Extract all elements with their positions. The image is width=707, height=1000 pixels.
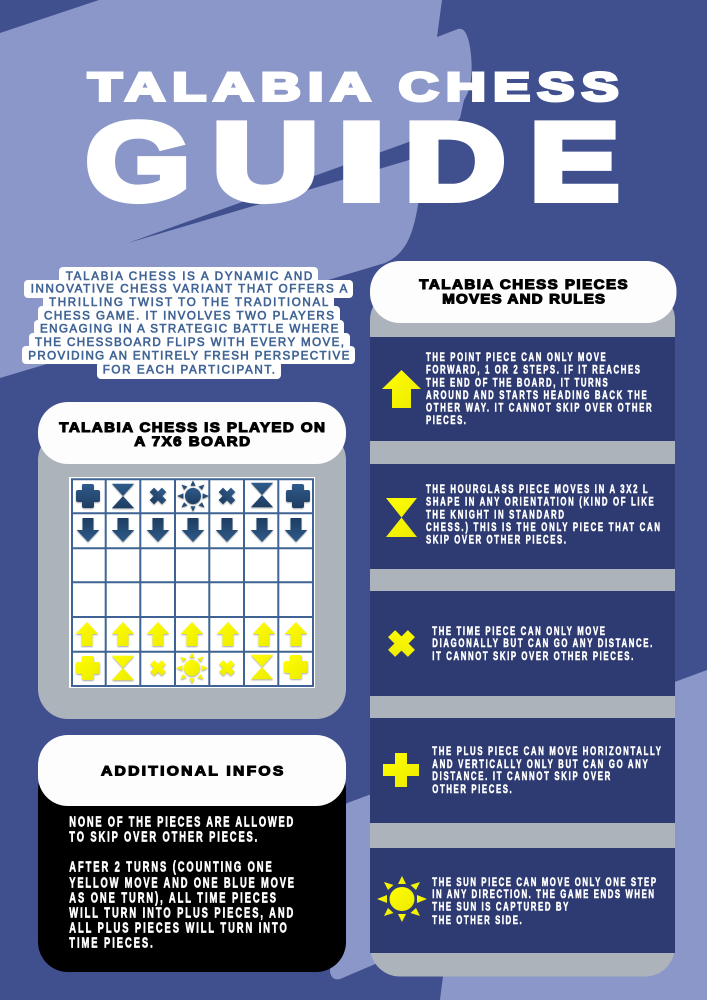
additional infos heading: ADDITIONAL INFOS xyxy=(101,764,283,779)
title line two: E xyxy=(530,100,619,223)
panel: pieces moves and rules xyxy=(370,261,676,976)
intro text block: THRILLING TWIST TO THE TRADITIONAL xyxy=(49,296,329,309)
additional infos heading xyxy=(38,735,346,806)
icon: plus xyxy=(383,753,419,787)
hourglass piece text: CHESS.) THIS IS THE ONLY PIECE THAT CAN xyxy=(426,522,660,535)
time piece text: DIAGONALLY BUT CAN GO ANY DISTANCE. xyxy=(432,638,652,651)
intro text block: ENGAGING IN A STRATEGIC BATTLE WHERE xyxy=(40,323,339,336)
background shape: upper left xyxy=(0,0,472,378)
intro text block: PROVIDING AN ENTIRELY FRESH PERSPECTIVE xyxy=(28,349,350,362)
additional infos text xyxy=(69,814,294,951)
time piece text xyxy=(432,626,652,664)
point piece text: THE POINT PIECE CAN ONLY MOVE xyxy=(426,352,606,365)
additional infos text: AS ONE TURN), ALL TIME PIECES xyxy=(69,890,276,906)
sun piece text: THE OTHER SIDE. xyxy=(432,915,522,928)
intro text block xyxy=(22,267,355,379)
sun piece text: IN ANY DIRECTION. THE GAME ENDS WHEN xyxy=(432,889,654,902)
title xyxy=(86,65,619,223)
additional infos text: YELLOW MOVE AND ONE BLUE MOVE xyxy=(69,875,294,891)
board heading xyxy=(38,402,346,464)
title line two: U xyxy=(212,100,319,223)
panel: additional infos xyxy=(38,735,346,972)
panel: board xyxy=(38,402,346,719)
title line two: D xyxy=(405,100,505,223)
hourglass piece text: SKIP OVER OTHER PIECES. xyxy=(426,534,566,547)
intro text block: TALABIA CHESS IS A DYNAMIC AND xyxy=(66,270,312,283)
blue pieces xyxy=(76,480,310,542)
chess board grid xyxy=(69,477,315,688)
intro text block: INNOVATIVE CHESS VARIANT THAT OFFERS A xyxy=(31,283,348,296)
plus piece text: OTHER PIECES. xyxy=(432,784,512,797)
additional infos text: ALL PLUS PIECES WILL TURN INTO xyxy=(69,919,287,936)
point piece text: PIECES. xyxy=(426,415,466,428)
icon: hourglass xyxy=(386,498,417,537)
title line one: TALABIA CHESS xyxy=(88,65,619,110)
plus piece text xyxy=(432,746,661,797)
hourglass piece text: SHAPE IN ANY ORIENTATION (KIND OF LIKE xyxy=(426,496,654,509)
point piece text: THE END OF THE BOARD, IT TURNS xyxy=(426,377,608,390)
additional infos text: TIME PIECES. xyxy=(69,934,153,951)
time piece text: IT CANNOT SKIP OVER OTHER PIECES. xyxy=(432,651,633,664)
yellow pieces xyxy=(76,622,308,684)
intro text block: THE CHESSBOARD FLIPS WITH EVERY MOVE, xyxy=(35,336,344,349)
additional infos text: NONE OF THE PIECES ARE ALLOWED xyxy=(69,814,293,830)
rules heading xyxy=(370,261,676,323)
rule: hourglass piece xyxy=(370,464,675,569)
sun piece text: THE SUN PIECE CAN MOVE ONLY ONE STEP xyxy=(432,877,656,890)
icon: sun xyxy=(377,876,427,922)
board heading: A 7X6 BOARD xyxy=(134,435,250,450)
icon: time cross xyxy=(382,624,421,663)
sun piece text: THE SUN IS CAPTURED BY xyxy=(432,901,568,914)
background sliver xyxy=(128,125,450,243)
point piece text: FORWARD, 1 OR 2 STEPS. IF IT REACHES xyxy=(426,364,640,377)
rules heading: TALABIA CHESS PIECES xyxy=(419,278,628,293)
additional infos text: AFTER 2 TURNS (COUNTING ONE xyxy=(69,859,272,875)
hourglass piece text: THE KNIGHT IN STANDARD xyxy=(426,509,564,522)
rule: sun piece xyxy=(370,848,675,953)
icon: point arrow xyxy=(382,370,421,408)
hourglass piece text xyxy=(426,484,660,547)
point piece text xyxy=(426,352,652,428)
intro text block: CHESS GAME. IT INVOLVES TWO PLAYERS xyxy=(44,309,334,322)
sun piece text xyxy=(432,877,656,928)
additional infos text: WILL TURN INTO PLUS PIECES, AND xyxy=(69,905,293,921)
background shape: lower right xyxy=(330,670,707,1000)
additional infos text: TO SKIP OVER OTHER PIECES. xyxy=(69,829,257,845)
plus piece text: DISTANCE. IT CANNOT SKIP OVER xyxy=(432,771,611,784)
rule: time piece xyxy=(370,591,675,696)
plus piece text: AND VERTICALLY ONLY BUT CAN GO ANY xyxy=(432,759,648,772)
time piece text: THE TIME PIECE CAN ONLY MOVE xyxy=(432,626,605,639)
rule: point piece xyxy=(370,337,675,441)
intro text block: FOR EACH PARTICIPANT. xyxy=(103,363,275,376)
hourglass piece text: THE HOURGLASS PIECE MOVES IN A 3X2 L xyxy=(426,484,648,497)
plus piece text: THE PLUS PIECE CAN MOVE HORIZONTALLY xyxy=(432,746,661,759)
rule: plus piece xyxy=(370,718,675,823)
title line two: G xyxy=(86,100,190,223)
point piece text: AROUND AND STARTS HEADING BACK THE xyxy=(426,390,647,403)
board heading: TALABIA CHESS IS PLAYED ON xyxy=(59,421,325,436)
rules heading: MOVES AND RULES xyxy=(442,292,605,307)
title line two: I xyxy=(337,101,386,223)
point piece text: OTHER WAY. IT CANNOT SKIP OVER OTHER xyxy=(426,402,652,415)
title line two xyxy=(86,100,619,223)
